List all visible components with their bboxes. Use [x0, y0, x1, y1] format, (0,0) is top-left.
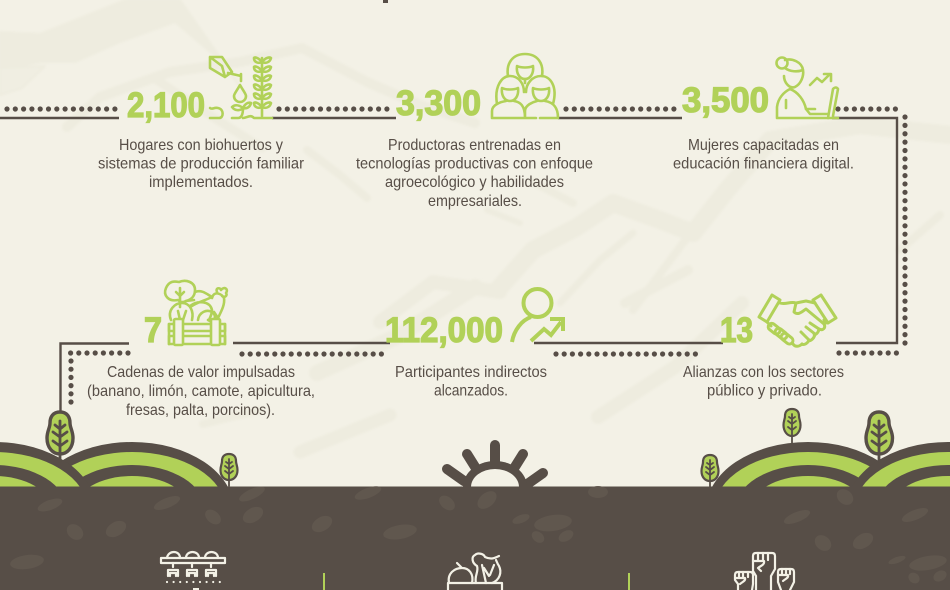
text: households: implementados.: [149, 174, 253, 191]
text: alliances: Alianzas con los sectores: [683, 364, 844, 381]
stat: 3,300 women producers: [356, 54, 593, 210]
text: households: [98, 137, 305, 191]
text: value chains: fresas, palta, porcinos).: [126, 402, 275, 419]
panel: dark ground: [0, 484, 950, 590]
text: participants: Participantes indirectos: [395, 364, 547, 381]
icon: three women: [492, 54, 558, 118]
text: women producers: Productoras entrenadas en: [388, 137, 561, 154]
title fragment: [383, 0, 388, 3]
text: value chains: [87, 364, 315, 419]
icon: vegetable basket: [448, 554, 502, 590]
stat: 112,000 participants: 112,000: [385, 311, 503, 350]
stat: 112,000 participants: [385, 289, 563, 400]
stat: 13 alliances: [683, 295, 844, 400]
illustration: sun: [447, 445, 543, 487]
text: alliances: público y privado.: [707, 382, 822, 400]
text: women trained: [673, 137, 854, 172]
text: women producers: empresariales.: [428, 193, 522, 210]
stat: 2,100 households: 2,100: [127, 86, 205, 125]
icon: woman with laptop: [776, 58, 838, 118]
icon: person with rising arrow: [512, 289, 563, 342]
text: households: sistemas de producción familiar: [98, 156, 305, 172]
illustration: left hills: [0, 442, 234, 578]
text: participants: [395, 364, 547, 400]
illustration: tree, large left: [47, 412, 73, 461]
text: participants: alcanzados.: [434, 382, 508, 400]
connector: timeline lines: [0, 118, 897, 411]
icon: vegetable crate: [165, 281, 227, 345]
text: households: Hogares con biohuertos y: [119, 137, 283, 154]
stat: 2,100 households: [98, 57, 305, 191]
icon: handshake: [759, 295, 836, 346]
illustration: tree, medium right: [784, 409, 800, 443]
illustration: right hills: [706, 442, 950, 578]
icon: watering can and plants: [210, 57, 272, 118]
text: alliances: [683, 364, 844, 400]
stat: 3,500 women trained: [673, 58, 854, 172]
green dividers: [323, 573, 630, 590]
text: women producers: agroecológico y habilidades: [385, 174, 564, 191]
background: faint mountains: [0, 0, 950, 452]
text: value chains: (banano, limón, camote, apicultura,: [87, 383, 315, 400]
icon: irrigation sprinklers: [161, 552, 225, 590]
stat: 7 value chains: [87, 281, 315, 419]
stat: 13 alliances: 13: [720, 311, 753, 350]
text: value chains: Cadenas de valor impulsadas: [107, 364, 295, 381]
illustration: tree, large right: [866, 412, 892, 461]
stat: 3,300 women producers: 3,300: [396, 84, 481, 123]
illustration: tree, small left: [220, 454, 238, 486]
illustration: tree, small right: [702, 455, 718, 487]
stat: 3,500 women trained: 3,500: [682, 81, 769, 120]
text: women trained: educación financiera digital.: [673, 156, 854, 172]
connector: dotted rows: [7, 109, 905, 404]
text: women producers: tecnologías productivas con enfoque: [356, 156, 593, 172]
text: women trained: Mujeres capacitadas en: [688, 137, 839, 154]
ground stones: [9, 484, 949, 586]
icon: raised fists: [735, 553, 794, 590]
stat: 7 value chains: 7: [144, 311, 162, 350]
text: women producers: [356, 137, 593, 210]
